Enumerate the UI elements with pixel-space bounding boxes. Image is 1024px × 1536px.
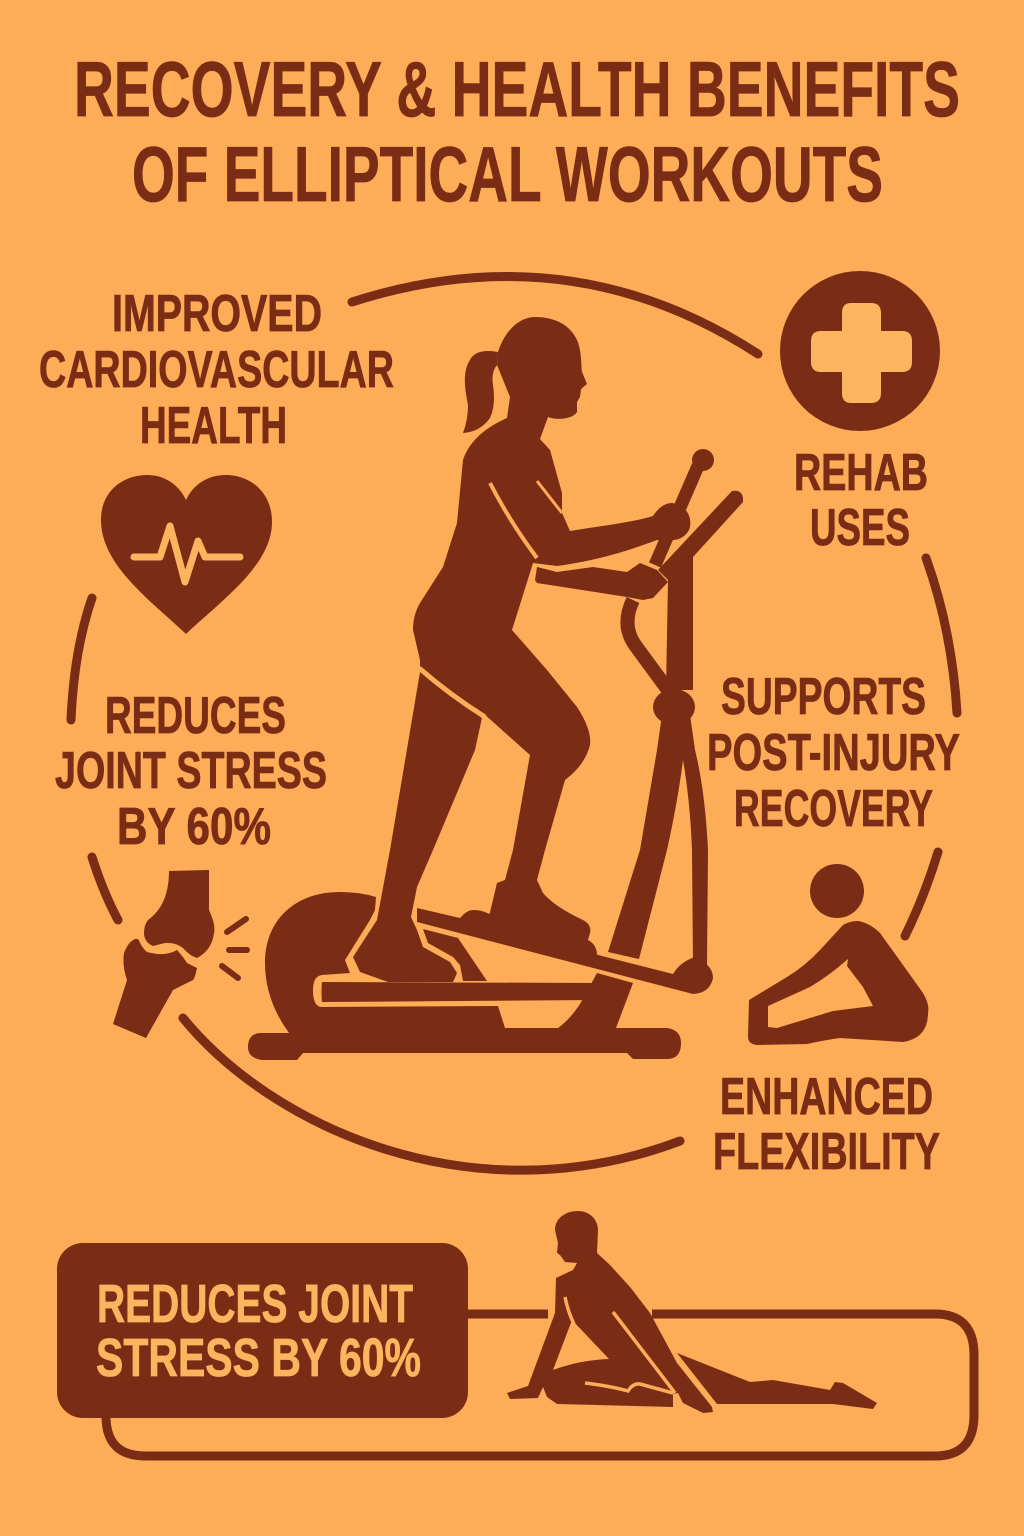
title xyxy=(74,45,960,218)
ponytail xyxy=(463,351,498,433)
heading: improved cardiovascular health xyxy=(39,285,394,455)
short handle xyxy=(655,466,698,565)
lower arm xyxy=(535,563,668,600)
icon: medical cross xyxy=(780,271,940,431)
heading: reduces joint stress: JOINT STRESS xyxy=(55,742,327,800)
banner: reduces joint stress xyxy=(57,1243,974,1456)
heading: reduces joint stress xyxy=(55,687,327,856)
post and long handle xyxy=(658,491,743,690)
heading: supports post-injury recovery: SUPPORTS xyxy=(721,668,926,726)
heading: reduces joint stress: BY 60% xyxy=(117,798,271,856)
heading: enhanced flexibility: FLEXIBILITY xyxy=(713,1123,940,1181)
elliptical machine xyxy=(248,449,743,1060)
pedal bar xyxy=(417,908,713,994)
person highlight lines xyxy=(419,481,562,717)
heading: improved cardiovascular health: CARDIOVASCULAR xyxy=(39,341,394,399)
banner: reduces joint stress: STRESS BY 60% xyxy=(96,1328,421,1388)
icon: heart with pulse xyxy=(101,475,272,634)
circular arcs xyxy=(71,276,957,1170)
icon: knee joint xyxy=(113,870,247,1038)
curved bar xyxy=(627,600,668,690)
central figure on elliptical machine xyxy=(248,317,743,1060)
heading: supports post-injury recovery xyxy=(707,668,960,838)
flywheel and base xyxy=(248,892,681,1060)
heading: rehab uses: REHAB xyxy=(794,444,928,502)
person silhouette xyxy=(353,317,690,982)
heading: reduces joint stress: REDUCES xyxy=(105,687,286,745)
icon: stretching figure xyxy=(507,1211,877,1413)
support triangle xyxy=(423,929,487,981)
banner outline xyxy=(106,1314,974,1456)
banner: reduces joint stress: REDUCES JOINT xyxy=(97,1274,413,1334)
heading: enhanced flexibility: ENHANCED xyxy=(720,1068,933,1126)
heading: improved cardiovascular health: IMPROVED xyxy=(112,285,322,343)
joint xyxy=(653,689,695,725)
heading: rehab uses: USES xyxy=(810,499,910,557)
strut with fork xyxy=(608,715,708,965)
heading: rehab uses xyxy=(794,444,928,557)
rail xyxy=(321,975,600,1002)
heading: supports post-injury recovery: RECOVERY xyxy=(734,780,933,838)
icon: seated stretch figure xyxy=(748,864,928,1045)
heading: enhanced flexibility xyxy=(713,1068,940,1181)
heading: improved cardiovascular health: HEALTH xyxy=(140,397,287,455)
